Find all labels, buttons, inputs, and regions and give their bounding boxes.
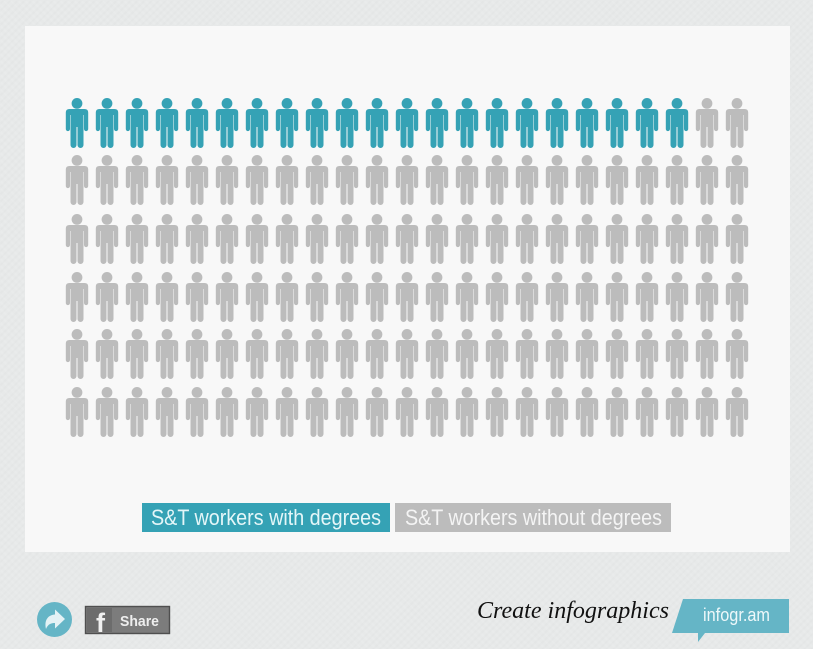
facebook share button: f: [96, 608, 106, 638]
panel: chart card: [25, 26, 790, 552]
facebook share button: Share: [120, 613, 159, 630]
row 5: grey people: [66, 329, 748, 379]
icon: share arrow button: [37, 602, 72, 637]
legend: [142, 503, 671, 532]
legend item: without degrees: S&T workers without degrees: [405, 505, 662, 530]
row 2: grey people: [66, 155, 748, 205]
row 4: grey people: [66, 272, 748, 322]
infogr.am speech bubble logo: [672, 599, 789, 642]
facebook share button: [86, 606, 170, 638]
pictogram chart: [66, 98, 748, 437]
tagline: create infographics: Create infographics: [477, 598, 669, 624]
row 1: grey people without degrees: [696, 98, 748, 148]
legend item: with degrees: S&T workers with degrees: [151, 505, 381, 530]
row 1: teal people with degrees: [66, 98, 688, 148]
row 3: grey people: [66, 214, 748, 264]
infogr.am speech bubble logo: infogr.am: [703, 605, 770, 625]
row 6: grey people: [66, 387, 748, 437]
